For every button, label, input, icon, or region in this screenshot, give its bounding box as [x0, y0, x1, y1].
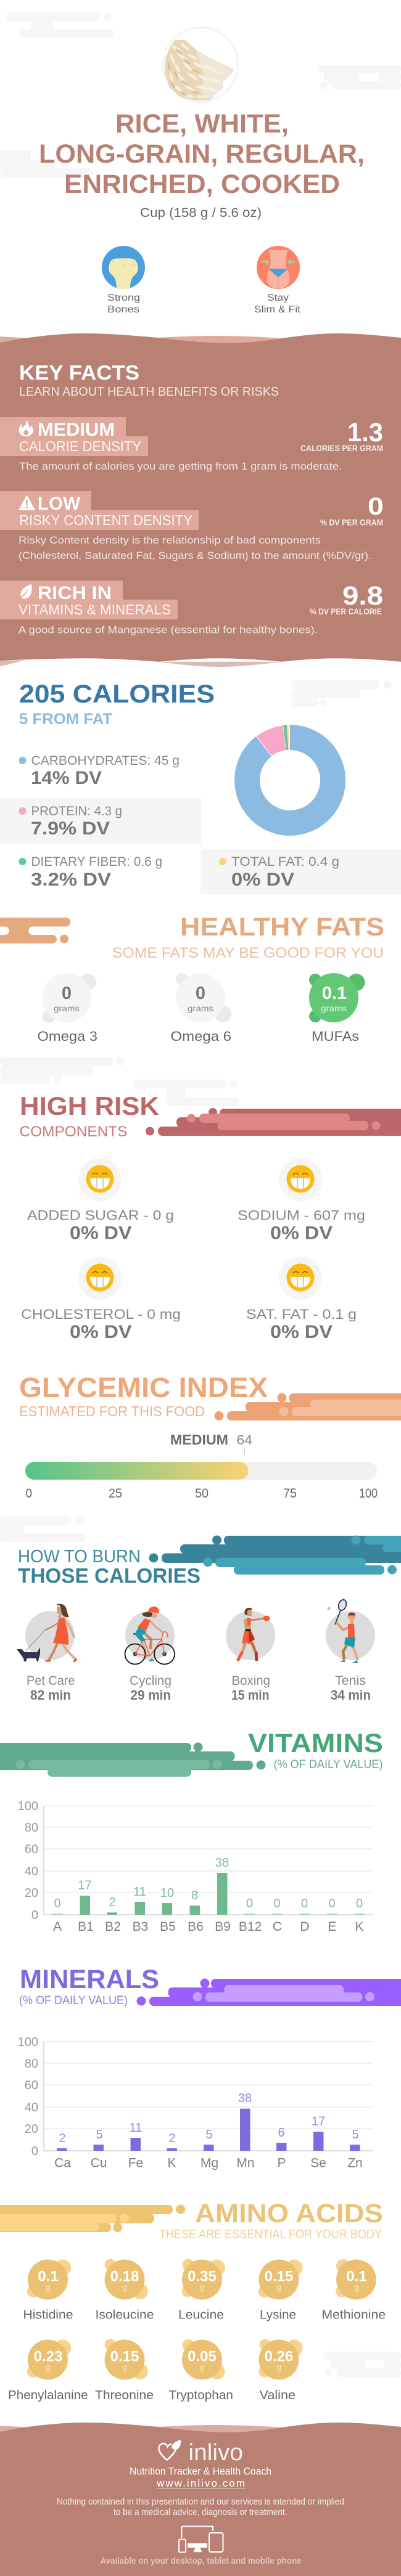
availability note: Available on your desktop, tablet and mobile phone [100, 2556, 301, 2566]
bar chart: vitamins: 0 [328, 1897, 336, 1910]
fact: rich in vitamins and minerals: A good source of Manganese (essential for healthy bones). [19, 624, 318, 636]
bar chart: minerals: 0 [31, 2145, 38, 2158]
fact: calorie density [0, 417, 383, 472]
amino acid: lysine: g [276, 2282, 281, 2292]
footer disclaimer [57, 2497, 344, 2517]
heading: key facts: KEY FACTS [19, 361, 139, 384]
section header: minerals [19, 1965, 401, 2007]
bar chart: vitamins [18, 1800, 373, 1934]
activity: tennis [326, 1599, 375, 1663]
panel: key facts [0, 333, 401, 667]
label: tennis: Tenis [335, 1674, 366, 1688]
fact: risky content density [0, 491, 384, 561]
bar chart: vitamins: D [300, 1920, 310, 1934]
bar chart: minerals: 5 [96, 2128, 103, 2142]
amino acid: leucine: g [200, 2282, 204, 2292]
bar chart: vitamins: 17 [78, 1878, 92, 1892]
title: RICE, WHITE, [115, 109, 289, 139]
bar chart: vitamins: B2 [105, 1920, 121, 1934]
bar chart: vitamins: 60 [25, 1843, 38, 1856]
section header: glycemic index [19, 1372, 401, 1420]
section header: glycemic index: ESTIMATED FOR THIS FOOD [19, 1403, 205, 1419]
amino acid: histidine: g [46, 2282, 50, 2292]
bar chart: minerals: 38 [238, 2092, 252, 2105]
section header: how to burn those calories: HOW TO BURN [18, 1547, 141, 1567]
amino acid: phenylalanine: g [46, 2362, 50, 2372]
bar chart: vitamins: 2 [109, 1896, 116, 1909]
amino acid: histidine: Histidine [23, 2309, 73, 2322]
legend: total fat [200, 849, 401, 894]
fact: rich in vitamins and minerals: RICH IN [38, 583, 112, 603]
bar chart: vitamins: 80 [25, 1821, 38, 1835]
bar chart: vitamins: K [355, 1920, 364, 1934]
amino acid: leucine: Leucine [178, 2309, 224, 2322]
section header: glycemic index: GLYCEMIC INDEX [19, 1372, 268, 1403]
activity: cycling [125, 1607, 175, 1664]
bar chart: minerals: Cu [91, 2156, 107, 2170]
fact: rich in vitamins and minerals: % DV PER CALORIE [310, 606, 382, 616]
footer disclaimer: to be a medical advice, diagnosis or treatment. [114, 2508, 287, 2517]
bar chart: vitamins: 0 [31, 1909, 38, 1922]
legend: protein: PROTEIN: 4.3 g [31, 804, 122, 818]
section header: healthy fats: HEALTHY FATS [180, 912, 384, 941]
amino acid: lysine [258, 2259, 302, 2322]
fact: calorie density: 1.3 [347, 418, 383, 447]
badge: mufas [309, 973, 365, 1044]
bar chart: vitamins: 11 [133, 1885, 146, 1899]
bar chart: minerals: 17 [312, 2115, 325, 2129]
gauge: glycemic index 64 medium: 0 [26, 1486, 32, 1501]
logo: inlivo: inlivo [189, 2440, 243, 2466]
risk item: added sugar: 0% DV [70, 1223, 132, 1244]
bar chart: minerals: 2 [59, 2132, 66, 2145]
bar chart: vitamins: B6 [188, 1920, 204, 1934]
bar chart: minerals: 40 [25, 2101, 38, 2114]
amino acid: methionine: Methionine [322, 2309, 386, 2322]
fact: rich in vitamins and minerals: 9.8 [342, 581, 383, 611]
bar chart: vitamins: 10 [160, 1886, 174, 1900]
footer url: www.inlivo.com [156, 2477, 245, 2489]
legend: protein: 7.9% DV [31, 818, 110, 839]
amino acid: threonine: g [122, 2362, 127, 2372]
legend: total fat: 0% DV [231, 870, 294, 890]
bar chart: vitamins: A [53, 1920, 62, 1934]
legend: protein [0, 798, 201, 844]
legend: dietary fiber [19, 855, 162, 890]
bar chart: vitamins: 38 [215, 1856, 229, 1870]
risk item: cholesterol: 0% DV [70, 1322, 132, 1342]
amino acid: methionine [322, 2259, 386, 2322]
activity: boxing [226, 1608, 275, 1661]
section header: amino acids: THESE ARE ESSENTIAL FOR YOUR BODY [159, 2228, 382, 2241]
bar chart: vitamins: B12 [239, 1920, 262, 1934]
section header: amino acids [0, 2199, 383, 2241]
bar chart: vitamins: E [328, 1920, 337, 1934]
amino acid: isoleucine: g [122, 2282, 127, 2292]
heading: 205 calories [19, 679, 215, 728]
heading: 205 calories: 205 CALORIES [19, 679, 215, 708]
gauge: glycemic index 64 medium: 100 [359, 1486, 378, 1501]
label: cycling: 29 min [131, 1687, 171, 1703]
risk item: added sugar [27, 1158, 174, 1244]
bar chart: minerals: 5 [205, 2128, 213, 2142]
section header: vitamins: VITAMINS [248, 1729, 383, 1758]
section header: high risk components: COMPONENTS [20, 1123, 127, 1140]
label: boxing: 15 min [231, 1687, 269, 1703]
section header: amino acids: AMINO ACIDS [195, 2199, 383, 2228]
amino acid: isoleucine: 0.18 [110, 2268, 139, 2285]
amino acid: tryptophan: Tryptophan [169, 2389, 233, 2402]
amino acid: methionine: g [354, 2282, 358, 2292]
amino acid: valine: g [276, 2362, 281, 2372]
bar chart: vitamins: 0 [54, 1897, 61, 1910]
legend: carbohydrates: CARBOHYDRATES: 45 g [31, 754, 180, 768]
bar chart: vitamins: 20 [25, 1886, 38, 1900]
amino acid: threonine [95, 2339, 154, 2402]
amino acid: phenylalanine: 0.23 [34, 2348, 62, 2365]
bar chart: minerals: 100 [18, 2036, 38, 2049]
badge: omega 3 [37, 973, 97, 1044]
amino acid: phenylalanine [8, 2339, 88, 2402]
footer tagline: Nutrition Tracker & Health Coach [130, 2465, 271, 2477]
label: boxing [231, 1674, 270, 1703]
bar chart: minerals: P [277, 2156, 286, 2170]
heading: 205 calories: 5 FROM FAT [19, 711, 112, 728]
amino acid: valine: Valine [259, 2389, 296, 2402]
label: strong bones: Strong [107, 293, 140, 303]
amino acid: histidine: 0.1 [38, 2268, 59, 2285]
label: strong bones [107, 293, 140, 315]
risk item: saturated fat [246, 1257, 357, 1342]
gauge: glycemic index 64 medium: 25 [109, 1486, 122, 1501]
bar chart: vitamins: B3 [133, 1920, 148, 1934]
label: cycling [130, 1674, 172, 1703]
fact: risky content density: 0 [368, 493, 384, 520]
amino acid: valine [259, 2339, 302, 2402]
amino acid: methionine: 0.1 [346, 2268, 367, 2285]
amino acid: leucine: 0.35 [188, 2268, 217, 2285]
badge: mufas: MUFAs [312, 1029, 359, 1044]
bar chart: minerals: Fe [128, 2156, 143, 2170]
bar chart: minerals [18, 2036, 373, 2170]
section header: vitamins [0, 1729, 383, 1777]
label: pet care: Pet Care [27, 1674, 75, 1688]
bar chart: minerals: Mn [236, 2156, 255, 2170]
label: tennis [331, 1674, 371, 1703]
fact: risky content density: LOW [38, 494, 81, 514]
title [39, 109, 365, 199]
amino acid: histidine [23, 2259, 73, 2322]
bar chart: minerals: 60 [25, 2079, 38, 2092]
fact: rich in vitamins and minerals: VITAMINS & MINERALS [19, 601, 171, 618]
risk item: cholesterol [21, 1257, 181, 1342]
bar chart: vitamins: 8 [191, 1889, 198, 1902]
logo: inlivo [159, 2440, 243, 2466]
bar chart: minerals: 11 [130, 2121, 142, 2135]
badge: mufas: 0.1 [322, 984, 347, 1003]
bar chart: minerals: Mg [200, 2156, 218, 2170]
legend: carbohydrates [19, 754, 180, 788]
badge: omega 3: grams [54, 1003, 80, 1013]
amino acid: valine: 0.26 [265, 2348, 293, 2365]
bar chart: vitamins: 0 [356, 1897, 363, 1910]
section header: high risk components: HIGH RISK [20, 1091, 159, 1120]
section header: minerals: MINERALS [20, 1965, 159, 1994]
bar chart: vitamins: 100 [18, 1800, 38, 1813]
gauge: glycemic index 64 medium: 50 [195, 1486, 209, 1501]
bar chart: vitamins: B5 [160, 1920, 176, 1934]
badge: omega 6: 0 [196, 984, 205, 1003]
amino acid: threonine: 0.15 [110, 2348, 139, 2365]
amino acid: isoleucine [95, 2259, 154, 2322]
section header: healthy fats: SOME FATS MAY BE GOOD FOR YOU [112, 945, 384, 961]
bar chart: minerals: 80 [25, 2057, 38, 2071]
risk item: added sugar: ADDED SUGAR - 0 g [27, 1208, 174, 1223]
bar chart: minerals: 20 [25, 2122, 38, 2136]
bar chart: minerals: K [167, 2156, 176, 2170]
badge: omega 6: Omega 6 [170, 1029, 231, 1044]
badge: omega 6: grams [188, 1003, 213, 1013]
fact: risky content density: % DV PER GRAM [320, 518, 383, 528]
amino acid: leucine [178, 2259, 225, 2322]
section header: high risk components [20, 1091, 401, 1140]
bar chart: vitamins: B1 [78, 1920, 94, 1934]
badge: mufas: grams [321, 1003, 347, 1013]
illustration: rice in a circle [163, 27, 238, 102]
amino acid: isoleucine: Isoleucine [95, 2309, 154, 2322]
badge: omega 3: 0 [62, 984, 72, 1003]
fact: rich in vitamins and minerals [0, 581, 383, 636]
fact: risky content density: RISKY CONTENT DENSITY [19, 512, 192, 528]
label: stay slim and fit [254, 293, 301, 315]
donut chart: calorie sources [234, 725, 345, 836]
amino acid: tryptophan: g [200, 2362, 204, 2372]
title: LONG-GRAIN, REGULAR, [39, 139, 365, 169]
risk item: sodium [238, 1158, 365, 1244]
fact: calorie density: MEDIUM [38, 420, 115, 440]
section header: minerals: (% OF DAILY VALUE) [19, 1994, 128, 2007]
amino acid: threonine: Threonine [95, 2389, 154, 2402]
amino acid: tryptophan: 0.05 [188, 2348, 217, 2365]
badge: omega 3: Omega 3 [37, 1029, 97, 1044]
gauge: glycemic index 64 medium: 64 [237, 1432, 252, 1448]
risk item: sodium: SODIUM - 607 mg [238, 1208, 365, 1223]
label: strong bones: Bones [107, 304, 139, 315]
label: boxing: Boxing [232, 1674, 270, 1688]
fact: calorie density: The amount of calories you are getting from 1 gram is moderate. [19, 460, 342, 472]
legend: dietary fiber: DIETARY FIBER: 0.6 g [31, 855, 162, 869]
amino acid: lysine: Lysine [260, 2309, 296, 2322]
bar chart: vitamins: 0 [301, 1897, 308, 1910]
gauge: glycemic index 64 medium [25, 1432, 378, 1501]
gauge: glycemic index 64 medium: MEDIUM [170, 1432, 228, 1448]
label: stay slim and fit: Stay [267, 293, 289, 303]
bar chart: vitamins: 0 [273, 1897, 281, 1910]
bar chart: vitamins: 0 [246, 1897, 253, 1910]
bar chart: vitamins: B9 [215, 1920, 231, 1934]
icon: stay slim and fit [257, 246, 300, 289]
legend: carbohydrates: 14% DV [31, 768, 102, 788]
subheading: key facts: LEARN ABOUT HEALTH BENEFITS OR RISKS [19, 385, 279, 399]
bar chart: minerals: 6 [278, 2126, 285, 2140]
serving size: Cup (158 g / 5.6 oz) [140, 206, 262, 220]
risk item: cholesterol: CHOLESTEROL - 0 mg [21, 1306, 181, 1322]
bar chart: minerals: 2 [168, 2132, 176, 2145]
amino acid: lysine: 0.15 [265, 2268, 293, 2285]
amino acid: phenylalanine: Phenylalanine [8, 2389, 88, 2402]
icon: devices [179, 2527, 223, 2553]
fact: risky content density: Risky Content density is the relationship of bad components [19, 534, 321, 546]
risk item: sodium: 0% DV [270, 1223, 333, 1244]
label: pet care: 82 min [30, 1687, 71, 1703]
label: cycling: Cycling [130, 1674, 172, 1688]
footer disclaimer: Nothing contained in this presentation and our services is intended or implied [57, 2497, 344, 2507]
section header: healthy fats [0, 912, 384, 961]
label: tennis: 34 min [331, 1687, 371, 1703]
fact: calorie density: CALORIE DENSITY [19, 438, 141, 454]
bar chart: vitamins: 40 [25, 1865, 38, 1878]
section header: how to burn those calories: THOSE CALORIES [18, 1564, 200, 1588]
fact: risky content density: (Cholesterol, Saturated Fat, Sugars & Sodium) to the amount (%DV/gr). [19, 550, 371, 561]
title: ENRICHED, COOKED [64, 169, 340, 199]
bar chart: minerals: Zn [347, 2156, 363, 2170]
bar chart: minerals: 5 [352, 2128, 359, 2142]
legend: dietary fiber: 3.2% DV [31, 870, 111, 890]
legend: total fat: TOTAL FAT: 0.4 g [231, 855, 339, 869]
icon: strong bones [102, 246, 145, 289]
risk item: saturated fat: SAT. FAT - 0.1 g [246, 1306, 357, 1322]
bar chart: minerals: Ca [54, 2156, 71, 2170]
gauge: glycemic index 64 medium: 75 [283, 1486, 297, 1501]
fact: calorie density: CALORIES PER GRAM [300, 443, 383, 453]
badge: omega 6 [170, 973, 231, 1044]
risk item: saturated fat: 0% DV [270, 1322, 333, 1342]
label: stay slim and fit: Slim & Fit [254, 304, 301, 315]
section header: how to burn those calories [18, 1536, 401, 1588]
bar chart: minerals: Se [310, 2156, 326, 2170]
bar chart: vitamins: C [273, 1920, 282, 1934]
section header: vitamins: (% OF DAILY VALUE) [274, 1758, 382, 1771]
amino acid: tryptophan [169, 2339, 233, 2402]
activity: pet care [17, 1604, 78, 1663]
panel: footer [0, 2423, 401, 2576]
label: pet care [27, 1674, 75, 1703]
